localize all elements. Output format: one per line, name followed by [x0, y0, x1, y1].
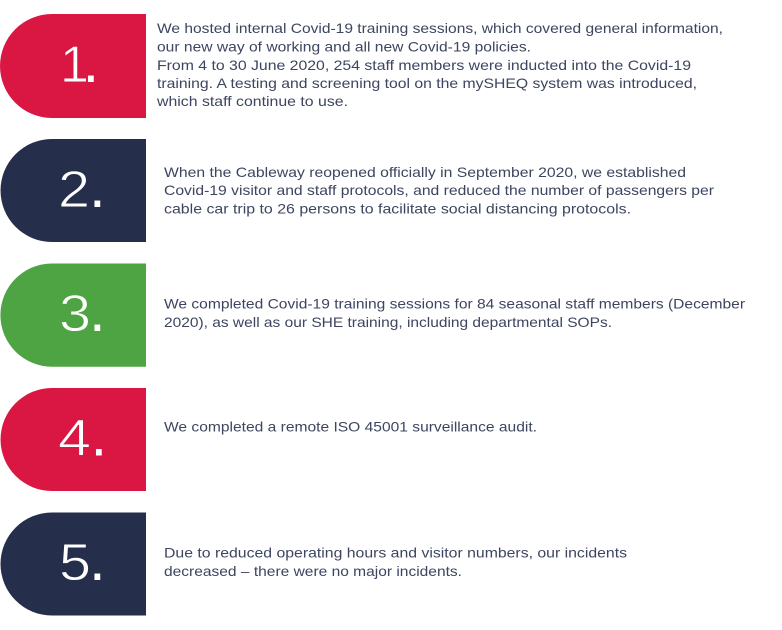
text: item 1: which staff continue to use.: [156, 93, 348, 109]
text: item 5: decreased – there were no major incidents.: [164, 563, 462, 579]
text: item 3: 2020), as well as our SHE training, including departmental SOPs.: [164, 314, 612, 330]
badge: item 2: 2: [58, 161, 90, 219]
badge: item 5: 5: [59, 534, 91, 592]
badge: item 1: [0, 14, 146, 118]
text: item 1: training. A testing and screening tool on the mySHEQ system was introduced,: [157, 75, 697, 91]
text: item 1: [156, 20, 723, 109]
text: item 1: our new way of working and all new Covid-19 policies.: [157, 38, 531, 54]
panel: item 5: [1, 512, 627, 616]
text: item 2: cable car trip to 26 persons to facilitate social distancing protocols.: [164, 200, 631, 216]
badge: item 4: .: [90, 402, 107, 468]
badge: item 3: 3: [59, 285, 91, 343]
badge: item 4: 4: [58, 410, 91, 468]
text: item 1: We hosted internal Covid-19 training sessions, which covered general information,: [157, 20, 723, 36]
text: item 2: When the Cableway reopened officially in September 2020, we established: [164, 164, 686, 180]
text: item 3: We completed Covid-19 training sessions for 84 seasonal staff members (December: [164, 296, 745, 312]
badge: item 4: [1, 388, 146, 491]
text: item 4: We completed a remote ISO 45001 surveillance audit.: [164, 418, 537, 434]
text: item 1: From 4 to 30 June 2020, 254 staff members were inducted into the Covid-19: [157, 57, 691, 73]
panel: item 4: [1, 388, 537, 491]
badge: item 5: .: [89, 526, 106, 593]
badge: item 5: [1, 512, 146, 616]
text: item 2: Covid-19 visitor and staff protocols, and reduced the number of passengers per: [164, 182, 714, 198]
text: item 5: Due to reduced operating hours and visitor numbers, our incidents: [164, 544, 627, 560]
badge: item 1: 1: [60, 36, 89, 94]
badge: item 3: .: [89, 277, 106, 344]
badge: item 2: .: [89, 153, 106, 220]
badge: item 3: [0, 264, 146, 367]
panel: item 1: [0, 14, 723, 118]
badge: item 1: .: [82, 28, 99, 95]
text: item 2: [164, 164, 714, 216]
text: item 3: [164, 296, 745, 330]
text: item 5: [164, 544, 627, 579]
badge: item 2: [1, 139, 146, 242]
panel: item 3: [0, 264, 745, 367]
panel: item 2: [1, 139, 714, 242]
